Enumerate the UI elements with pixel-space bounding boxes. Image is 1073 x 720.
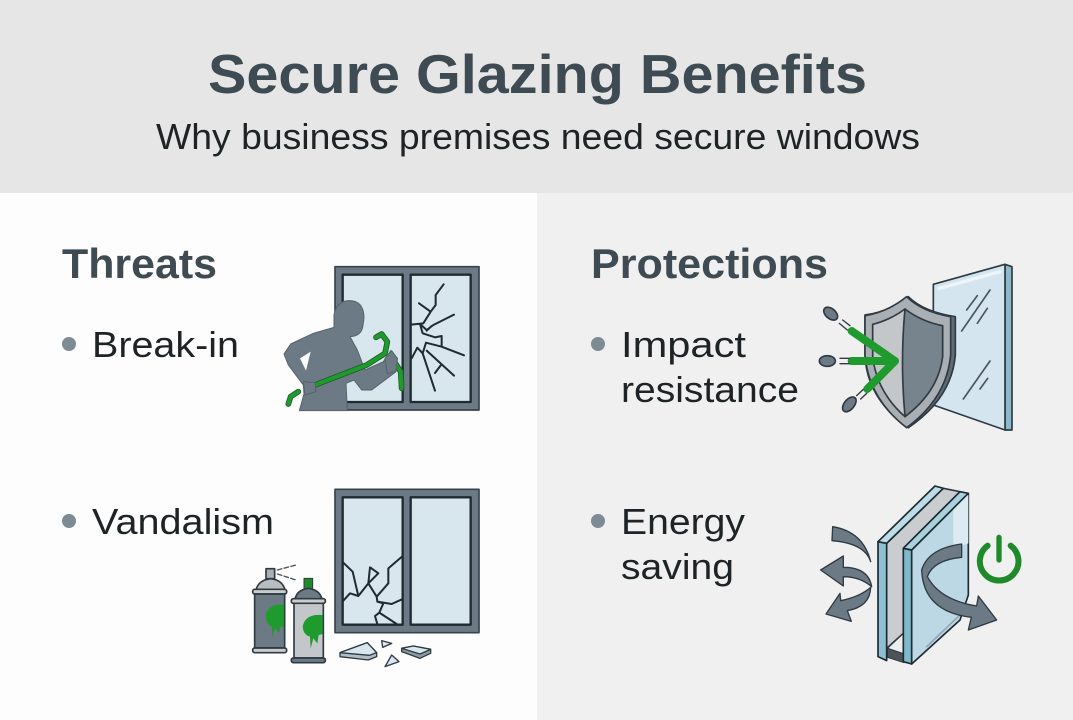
- panel: protections background: [537, 193, 1073, 720]
- panel: threats: [62, 240, 479, 667]
- list item: break-in: Break-in: [92, 324, 239, 365]
- burglar silhouette: [284, 301, 397, 411]
- list item: impact resistance: resistance: [621, 369, 799, 410]
- subtitle: Why business premises need secure windows: [156, 116, 920, 157]
- spray can right: [291, 578, 325, 663]
- panel: header band: [0, 0, 1073, 193]
- icon: double glazing with heat arrows and power symbol: [821, 486, 1018, 664]
- icon: burglar with crowbar at window: [284, 267, 479, 411]
- list item: impact resistance: [591, 324, 799, 410]
- heading: protections: Protections: [591, 240, 828, 287]
- heading: threats: Threats: [62, 240, 217, 287]
- spray can left: [253, 565, 296, 653]
- title: Secure Glazing Benefits: [208, 43, 867, 105]
- panel: protections: [591, 240, 1018, 664]
- list item: energy saving: Energy: [621, 501, 745, 542]
- list item: vandalism: Vandalism: [92, 501, 274, 542]
- list item: energy saving: [591, 501, 745, 587]
- icon: shield deflecting impacts in front of glass: [819, 264, 1012, 430]
- list item: impact resistance: Impact: [621, 324, 746, 365]
- list item: energy saving: saving: [621, 546, 734, 587]
- glass shards: [340, 641, 431, 667]
- icon: vandalised window with spray cans and shards: [253, 489, 479, 667]
